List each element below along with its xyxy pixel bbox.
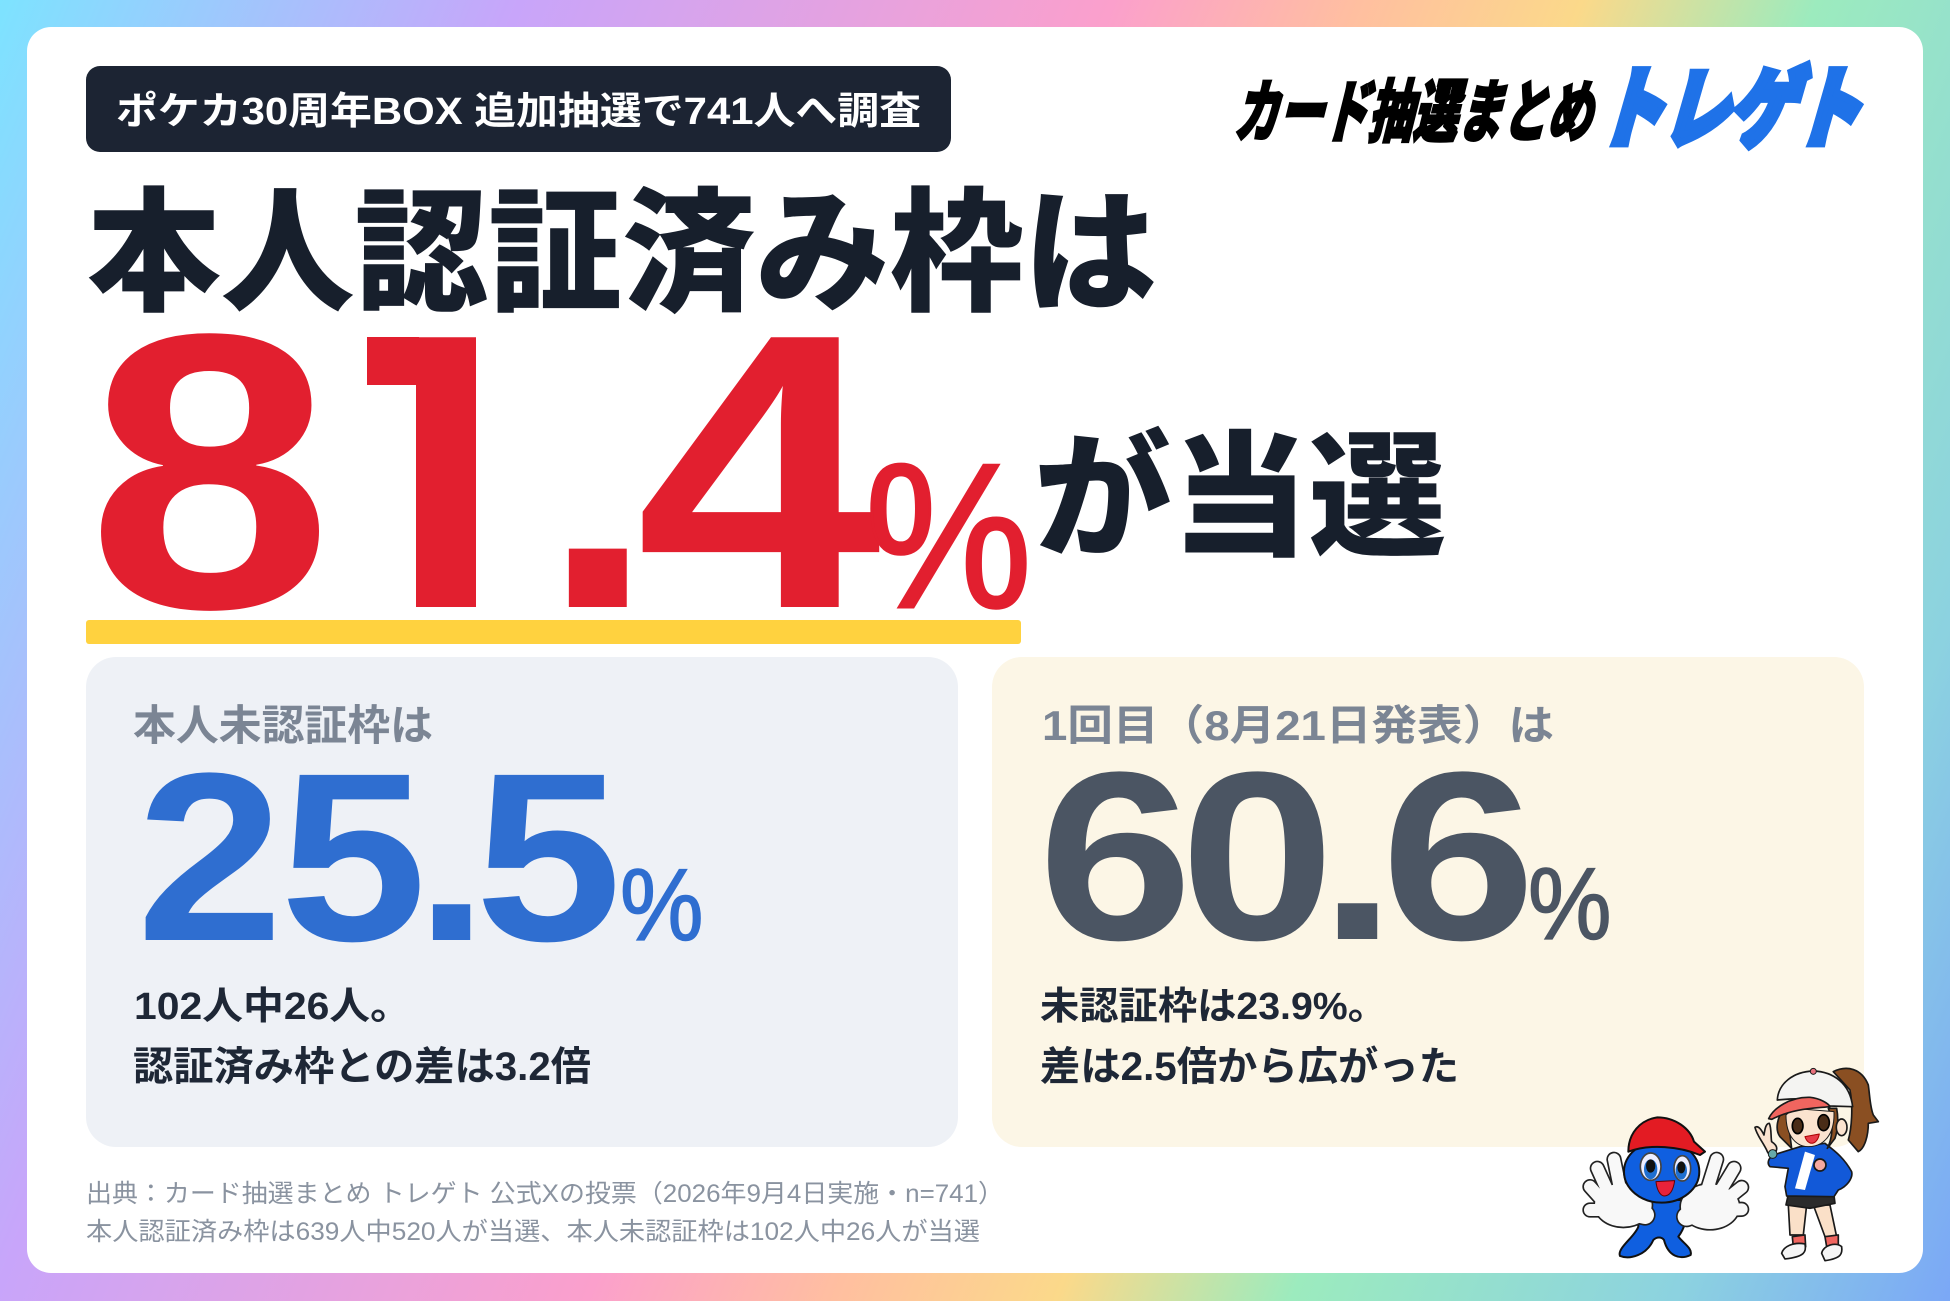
- logo: カード抽選まとめ: [1228, 57, 1611, 156]
- panel note: 差は2.5倍から広がった: [1040, 1045, 1459, 1089]
- stat 60.6%: %: [1528, 847, 1612, 961]
- main stat 81.4%: [101, 333, 1027, 611]
- yellow underline: [86, 620, 1021, 644]
- main stat 81.4%: 4: [636, 253, 884, 691]
- headline: 本人認証済み枠は: [87, 145, 1157, 339]
- stat 25.5%: 25.5: [137, 724, 622, 991]
- stat 25.5%: %: [620, 848, 704, 962]
- icon: girl mascot: [1755, 1068, 1878, 1261]
- panel note: [1040, 986, 1459, 1089]
- panel: first round: [992, 657, 1864, 1147]
- source note: 出典：カード抽選まとめ トレゲト 公式Xの投票（2026年9月4日実施・n=741）: [86, 1180, 1004, 1208]
- main stat 81.4%: 8: [87, 253, 333, 691]
- logo: [1228, 40, 1886, 164]
- top badge: ポケカ30周年BOX 追加抽選で741人へ調査: [116, 91, 921, 133]
- main stat 81.4%: 1: [294, 253, 572, 691]
- stat 60.6%: 60.6: [1038, 723, 1536, 991]
- panel label: 1回目（8月21日発表）は: [1042, 702, 1554, 749]
- panel note: 未認証枠は23.9%。: [1040, 986, 1387, 1028]
- headline suffix: が当選: [1034, 388, 1446, 585]
- icon: blue mascot: [1590, 1117, 1742, 1257]
- panel label: 本人未認証枠は: [133, 702, 433, 749]
- panel note: 認証済み枠との差は3.2倍: [133, 1045, 591, 1089]
- panel note: 102人中26人。: [134, 986, 411, 1028]
- mascots: [1590, 1068, 1878, 1261]
- source note: [86, 1180, 1004, 1246]
- main stat 81.4%: .: [541, 253, 655, 691]
- panel: unverified: [86, 657, 958, 1147]
- top badge: [86, 66, 951, 152]
- panel note: [133, 986, 591, 1089]
- main stat 81.4%: %: [865, 421, 1032, 651]
- source note: 本人認証済み枠は639人中520人が当選、本人未認証枠は102人中26人が当選: [86, 1218, 980, 1246]
